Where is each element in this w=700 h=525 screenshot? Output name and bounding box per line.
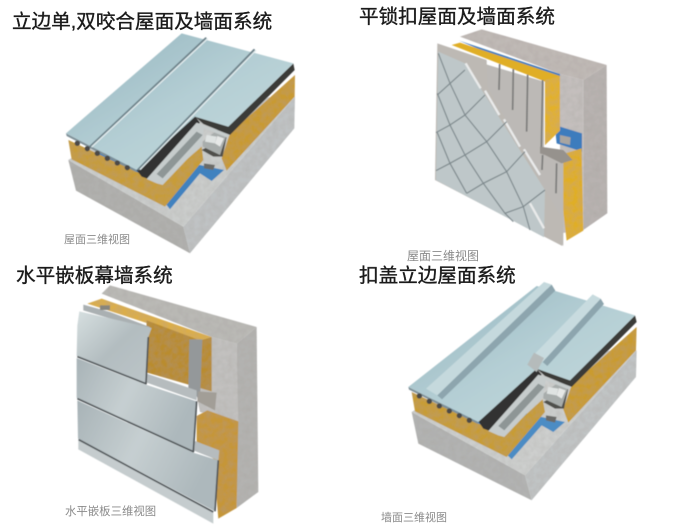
diagram: snap-on standing seam roof system bbox=[408, 282, 637, 500]
clips bbox=[466, 63, 544, 228]
lock seams bbox=[436, 53, 545, 230]
metal roof sheet bbox=[66, 33, 293, 170]
title: flat lock: 平锁扣屋面及墙面系统 bbox=[359, 6, 555, 28]
diamond tiles bbox=[436, 52, 545, 237]
caption: roof 3D view: 屋面三维视图 bbox=[64, 234, 130, 246]
caption: roof 3D view 2: 屋面三维视图 bbox=[407, 249, 479, 263]
rock wool insulation bbox=[68, 75, 295, 207]
waterproof membrane bbox=[72, 150, 224, 209]
vertical rails bbox=[485, 64, 563, 246]
metal roof sheet bbox=[408, 286, 635, 422]
concrete wall bbox=[102, 285, 258, 508]
concrete wall bbox=[460, 29, 607, 233]
snap-on ribs bbox=[426, 282, 604, 399]
insulation bbox=[452, 43, 560, 145]
diagram: flat-lock facade system bbox=[435, 29, 607, 246]
waterproof membrane bbox=[415, 402, 565, 459]
concrete base bbox=[412, 350, 637, 500]
title: snap-on: 扣盖立边屋面系统 bbox=[359, 265, 516, 287]
ribs bbox=[90, 38, 256, 169]
waterproof membrane bbox=[459, 41, 582, 152]
insulation bbox=[87, 299, 238, 519]
corrugations bbox=[75, 141, 130, 170]
diagram: standing seam roof system bbox=[66, 33, 295, 253]
caption: wall 3D view: 墙面三维视图 bbox=[381, 512, 447, 524]
fixing bracket bbox=[540, 135, 573, 163]
backing sheet bbox=[435, 43, 563, 246]
wall panels bbox=[77, 311, 218, 524]
rock wool insulation bbox=[412, 327, 637, 457]
caption: horizontal panel 3D view: 水平嵌板三维视图 bbox=[65, 506, 156, 518]
panel joints bbox=[77, 337, 218, 512]
foam layer bbox=[136, 116, 200, 179]
title: standing seam: 立边单,双咬合屋面及墙面系统 bbox=[12, 11, 272, 33]
diagram: horizontal panel curtain wall bbox=[77, 285, 258, 524]
purlin bbox=[488, 375, 572, 437]
title: horizontal panel: 水平嵌板幕墙系统 bbox=[16, 265, 173, 287]
concrete base bbox=[68, 97, 295, 253]
bracket bbox=[202, 127, 227, 170]
bracket bbox=[543, 379, 568, 423]
purlin bbox=[147, 123, 230, 185]
support rails bbox=[83, 305, 219, 460]
corrugations bbox=[417, 393, 472, 423]
foam layer bbox=[478, 369, 542, 431]
